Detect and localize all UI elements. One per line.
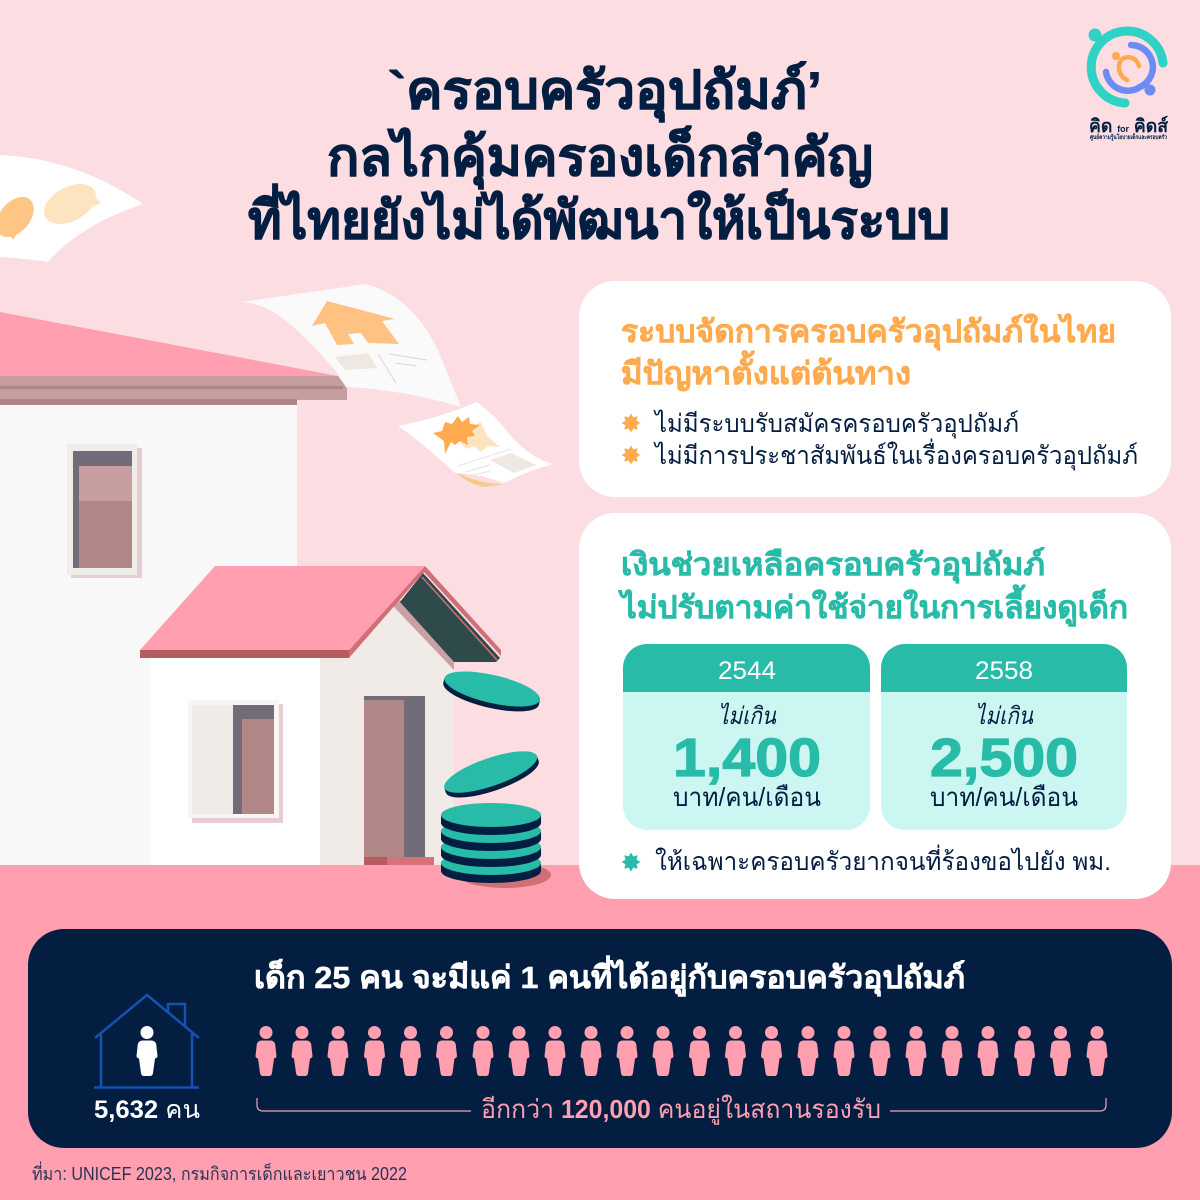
card: 2544: บาท/คน/เดือน <box>673 782 821 812</box>
source: ที่มา: UNICEF 2023, กรมกิจการเด็กและเยาวชน 2022 <box>32 1161 407 1184</box>
icon: house with one child <box>94 995 199 1088</box>
logo: ศูนย์ความรู้นโยบายเด็กและครอบครัว <box>1090 132 1167 142</box>
small house window <box>188 700 283 823</box>
card: 2544: ไม่เกิน <box>718 702 777 730</box>
panel: financial support <box>579 513 1171 899</box>
bullet list: problems: ไม่มีระบบรับสมัครครอบครัวอุปถัมภ์ <box>653 409 1019 439</box>
note: eligibility: ให้เฉพาะครอบครัวยากจนที่ร้องขอไปยัง พม. <box>655 844 1111 876</box>
large house <box>0 312 347 865</box>
row of 24 children <box>256 1026 1108 1076</box>
title: `ครอบครัวอุปถัมภ์’ <box>388 61 822 123</box>
card: 2544: 2544 <box>718 657 776 685</box>
card: 2558: ไม่เกิน <box>975 702 1034 730</box>
flying paper: speech bubbles <box>0 155 143 262</box>
panel heading: support: ไม่ปรับตามค่าใช้จ่ายในการเลี้ยงดูเด็ก <box>618 584 1128 627</box>
card: 2544 <box>623 644 870 830</box>
panel heading: support <box>618 547 1128 627</box>
bracket <box>257 1098 1106 1111</box>
bracket label: อีกกว่า 120,000 คนอยู่ในสถานรองรับ <box>481 1094 881 1125</box>
flying paper: house <box>243 284 461 407</box>
logo: คิด for คิดส์ <box>1089 115 1169 136</box>
card: 2558: บาท/คน/เดือน <box>930 782 1078 812</box>
panel heading: problems: มีปัญหาตั้งแต่ต้นทาง <box>621 350 911 392</box>
panel heading: problems <box>621 313 1116 392</box>
title <box>248 61 950 250</box>
title: กลไกคุ้มครองเด็กสำคัญ <box>327 126 873 190</box>
small house <box>140 566 501 865</box>
small house door <box>364 696 434 865</box>
statistics heading: เด็ก 25 คน จะมีแค่ 1 คนที่ได้อยู่กับครอบครัวอุปถัมภ์ <box>254 955 965 997</box>
panel: registration problems <box>579 281 1171 497</box>
card: 2558: 2,500 <box>930 728 1078 788</box>
logo <box>1088 28 1169 142</box>
title: ที่ไทยยังไม่ได้พัฒนาให้เป็นระบบ <box>248 184 950 250</box>
card: 2558: 2558 <box>975 657 1033 685</box>
panel heading: problems: ระบบจัดการครอบครัวอุปถัมภ์ในไทย <box>621 313 1116 351</box>
bullet list: problems: ไม่มีการประชาสัมพันธ์ในเรื่องครอบครัวอุปถัมภ์ <box>653 438 1138 471</box>
large house window <box>67 444 142 578</box>
card: 2558 <box>881 644 1127 830</box>
bullet list: problems <box>622 409 1138 471</box>
label: 5,632: 5,632 คน <box>94 1096 200 1124</box>
coins <box>440 664 551 888</box>
flying paper: burst <box>398 402 553 487</box>
card: 2544: 1,400 <box>673 728 821 788</box>
panel heading: support: เงินช่วยเหลือครอบครัวอุปถัมภ์ <box>621 547 1045 584</box>
panel: children statistics <box>28 929 1172 1148</box>
